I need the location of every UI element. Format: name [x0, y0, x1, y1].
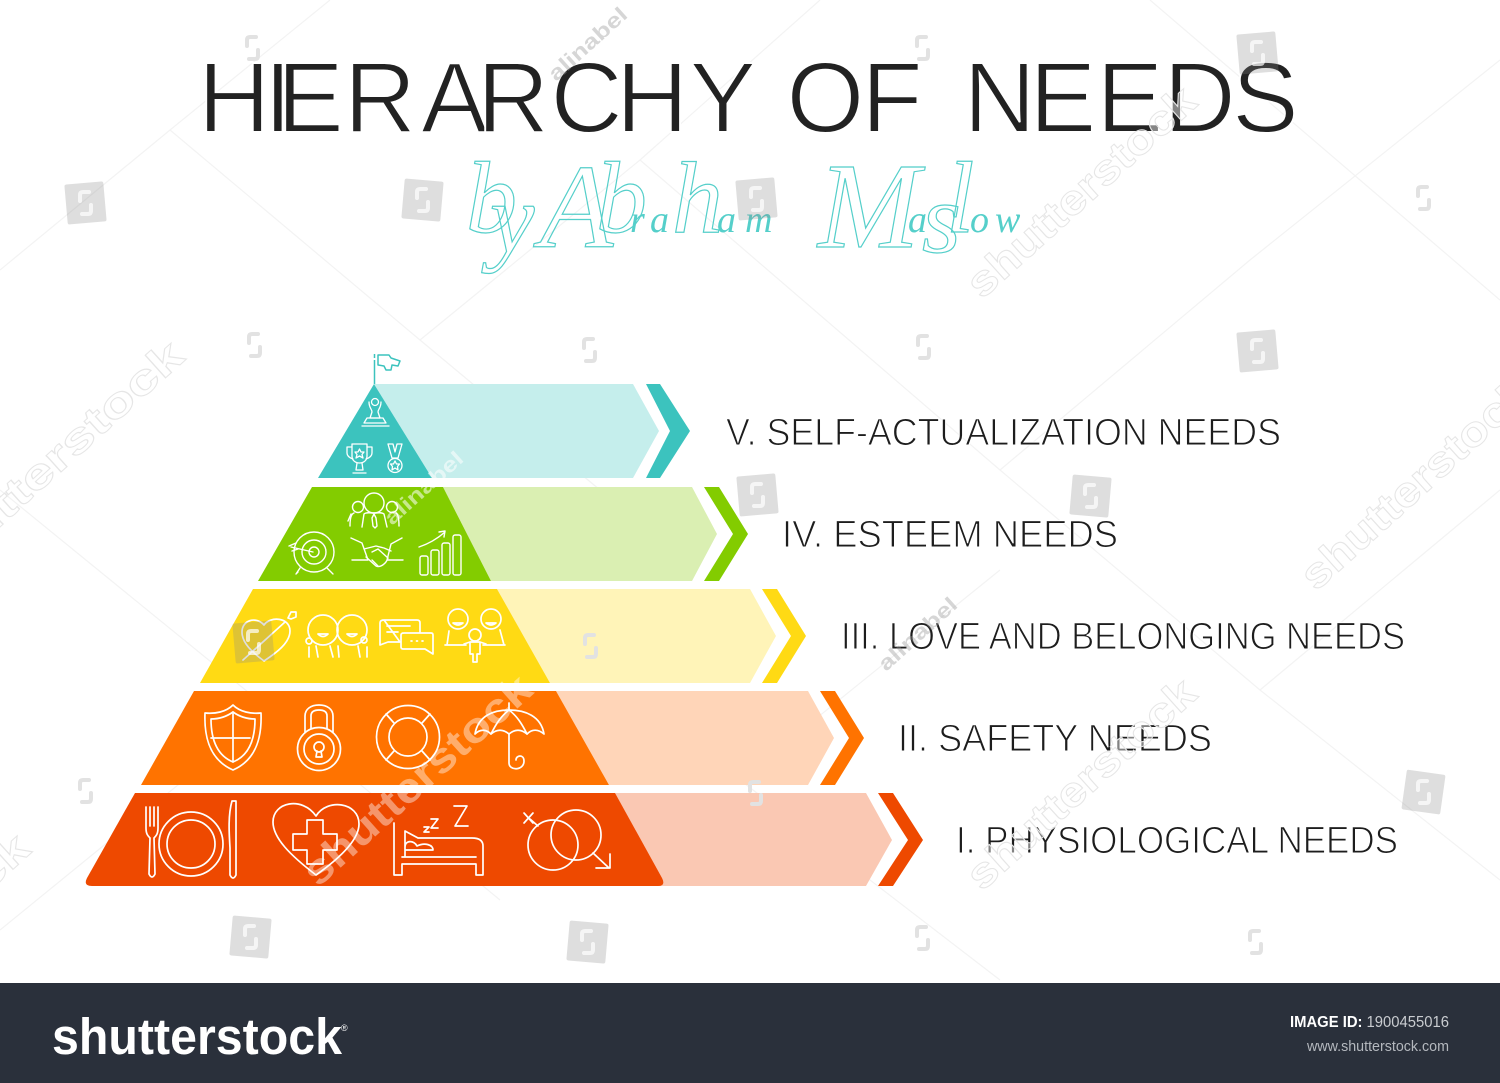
icon: target: [289, 532, 334, 574]
icon: padlock: [298, 705, 340, 770]
subtitle: h: [672, 142, 723, 255]
image id: IMAGE ID: 1900455016: [1290, 1014, 1449, 1031]
labels: [726, 412, 1405, 862]
tier 3 band: [497, 589, 776, 683]
icon: fork: [146, 807, 158, 877]
tier 5 triangle: [318, 384, 432, 478]
subtitle: a: [650, 199, 669, 241]
subtitle: [466, 139, 1021, 274]
icon: growth bars: [419, 531, 461, 575]
icon: heart with arrow: [242, 612, 296, 661]
tier 2 chevron: [820, 691, 864, 785]
icon: medal: [388, 444, 402, 472]
subtitle: l: [946, 142, 974, 255]
tier 3 trapezoid: [200, 589, 550, 683]
tier 2 band: [556, 691, 834, 785]
icon: family: [445, 609, 505, 662]
subtitle: b: [596, 142, 647, 255]
tier 4 band: [443, 487, 717, 581]
title: OF: [786, 42, 923, 154]
tier 2 trapezoid: [141, 691, 609, 785]
tier 1 chevron: [878, 793, 923, 886]
subtitle: o: [970, 199, 989, 241]
label: esteem: IV. ESTEEM NEEDS: [782, 514, 1118, 556]
icon: lifebuoy: [376, 706, 440, 768]
icon: speech bubbles: [380, 620, 433, 654]
icon: handshake: [351, 538, 403, 567]
tier 5 chevron: [646, 384, 690, 478]
subtitle: M: [816, 139, 926, 274]
icon: statue on podium: [362, 398, 389, 426]
title: HIERARCHY: [198, 42, 754, 154]
website: www.shutterstock.com: [1306, 1038, 1449, 1055]
label: safety: II. SAFETY NEEDS: [898, 718, 1212, 760]
icon: group of people: [348, 493, 399, 528]
subtitle: w: [995, 199, 1021, 241]
tier 4 trapezoid: [258, 487, 491, 581]
icon: plate: [159, 812, 223, 876]
subtitle: a: [908, 199, 927, 241]
watermark overlay: shutterstock: [957, 668, 1206, 899]
icon: trophy: [347, 444, 372, 473]
icon: bed and zzz: [394, 806, 483, 875]
subtitle: b: [466, 142, 517, 255]
icon: shield: [205, 705, 261, 770]
icon: umbrella: [475, 703, 544, 769]
watermark overlay: shutterstock: [293, 664, 542, 895]
footer logo: shutterstock: [52, 1008, 343, 1065]
label: love and belonging: III. LOVE AND BELONGING NEEDS: [841, 616, 1405, 658]
icon: heart with cross: [273, 804, 359, 875]
icon: flag: [374, 354, 400, 384]
subtitle: y: [481, 163, 535, 274]
watermark overlay: alinabel: [380, 447, 468, 530]
footer bar: [0, 983, 1500, 1083]
tier 1 trapezoid: [86, 793, 663, 886]
icon: knife: [229, 801, 236, 878]
icon: couple: [306, 615, 367, 657]
watermark overlay: shutterstock: [957, 76, 1206, 307]
watermark overlay: alinabel: [544, 3, 632, 86]
label: physiological: I. PHYSIOLOGICAL NEEDS: [956, 820, 1398, 862]
icon: gender symbols: [524, 810, 610, 870]
title: NEEDS: [964, 42, 1299, 154]
tier 5 band: [374, 384, 659, 478]
subtitle: a: [717, 199, 736, 241]
tier 4 chevron: [704, 487, 748, 581]
title: [198, 42, 1299, 154]
label: self-actualization: V. SELF-ACTUALIZATION NEEDS: [726, 412, 1281, 454]
pyramid: [86, 354, 923, 886]
subtitle: r: [630, 199, 645, 241]
watermark overlay: alinabel: [874, 593, 962, 676]
tier 3 chevron: [762, 589, 806, 683]
subtitle: A: [533, 140, 614, 273]
subtitle: m: [745, 199, 772, 241]
subtitle: s: [922, 163, 961, 274]
tier 1 band: [615, 793, 892, 886]
registered mark: ®: [341, 1023, 348, 1033]
